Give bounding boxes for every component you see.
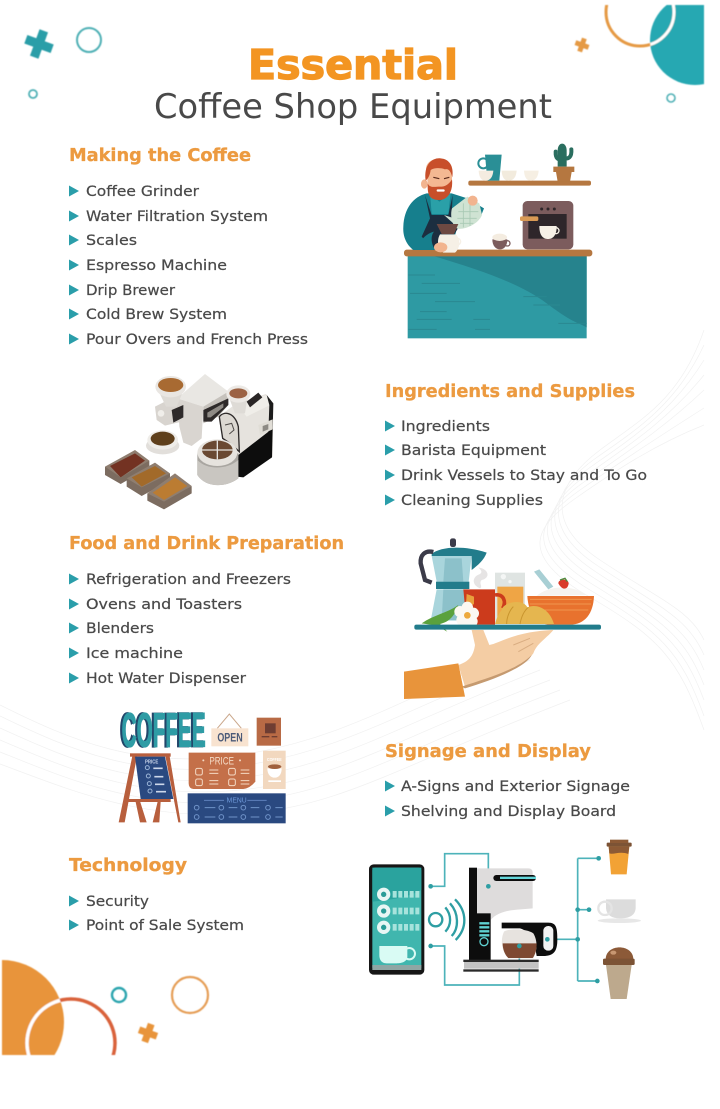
illustration: signage and menus: COFFEE: [120, 704, 204, 757]
panel: making the coffee: [69, 145, 308, 348]
panel: food and drink preparation: Food and Drink Preparation: [69, 533, 344, 554]
panel: technology: Technology: [69, 855, 187, 876]
panel: ingredients and supplies: Cleaning Supplies: [401, 493, 543, 509]
panel: signage and display: [385, 741, 630, 820]
panel: technology: Security: [86, 894, 149, 910]
illustration: signage and menus: PRICE: [145, 760, 159, 766]
panel: food and drink preparation: [69, 533, 344, 687]
panel: food and drink preparation: Ice machine: [86, 646, 183, 662]
panel: ingredients and supplies: Barista Equipment: [401, 443, 546, 459]
panel: technology: Point of Sale System: [86, 918, 244, 934]
illustration: hand holding breakfast tray: [404, 538, 601, 699]
panel: making the coffee: Drip Brewer: [86, 283, 175, 299]
illustration: signage and menus: OPEN: [217, 731, 243, 745]
panel: making the coffee: Cold Brew System: [86, 307, 227, 323]
title: Coffee Shop Equipment: [154, 87, 552, 127]
panel: making the coffee: Water Filtration System: [86, 209, 268, 225]
decoration: bottom left shapes: [1, 959, 210, 1056]
panel: ingredients and supplies: Ingredients: [401, 419, 490, 435]
illustration: signage and menus: COFFEE: [267, 757, 282, 763]
title: [154, 41, 552, 127]
panel: making the coffee: Scales: [86, 233, 137, 249]
decoration: top right shapes: [574, 4, 705, 104]
panel: making the coffee: Making the Coffee: [69, 145, 251, 166]
illustration: signage and menus: MENU: [227, 795, 247, 804]
panel: ingredients and supplies: Ingredients and Supplies: [385, 381, 635, 402]
decoration: top left shapes: [21, 26, 101, 98]
panel: food and drink preparation: Refrigeration and Freezers: [86, 572, 291, 588]
panel: food and drink preparation: Blenders: [86, 621, 154, 637]
panel: ingredients and supplies: Drink Vessels to Stay and To Go: [401, 468, 647, 484]
panel: technology: [69, 855, 244, 934]
panel: making the coffee: Coffee Grinder: [86, 184, 199, 200]
illustration: barista at counter: [403, 144, 592, 338]
panel: making the coffee: Pour Overs and French Press: [86, 332, 308, 348]
panel: signage and display: Shelving and Display Board: [401, 804, 616, 820]
illustration: coffee grinders and trays: [105, 374, 273, 509]
panel: food and drink preparation: Ovens and Toasters: [86, 597, 242, 613]
illustration: connected coffee machine: [369, 840, 641, 999]
illustration: signage and menus: [119, 704, 286, 823]
panel: signage and display: Signage and Display: [385, 741, 591, 762]
panel: signage and display: A-Signs and Exterior Signage: [401, 779, 630, 795]
title: Essential: [248, 41, 458, 89]
illustration: signage and menus: COFFEE: [122, 704, 206, 757]
panel: ingredients and supplies: [385, 381, 647, 509]
illustration: signage and menus: PRICE: [209, 755, 234, 767]
panel: food and drink preparation: Hot Water Dispenser: [86, 671, 246, 687]
panel: making the coffee: Espresso Machine: [86, 258, 227, 274]
